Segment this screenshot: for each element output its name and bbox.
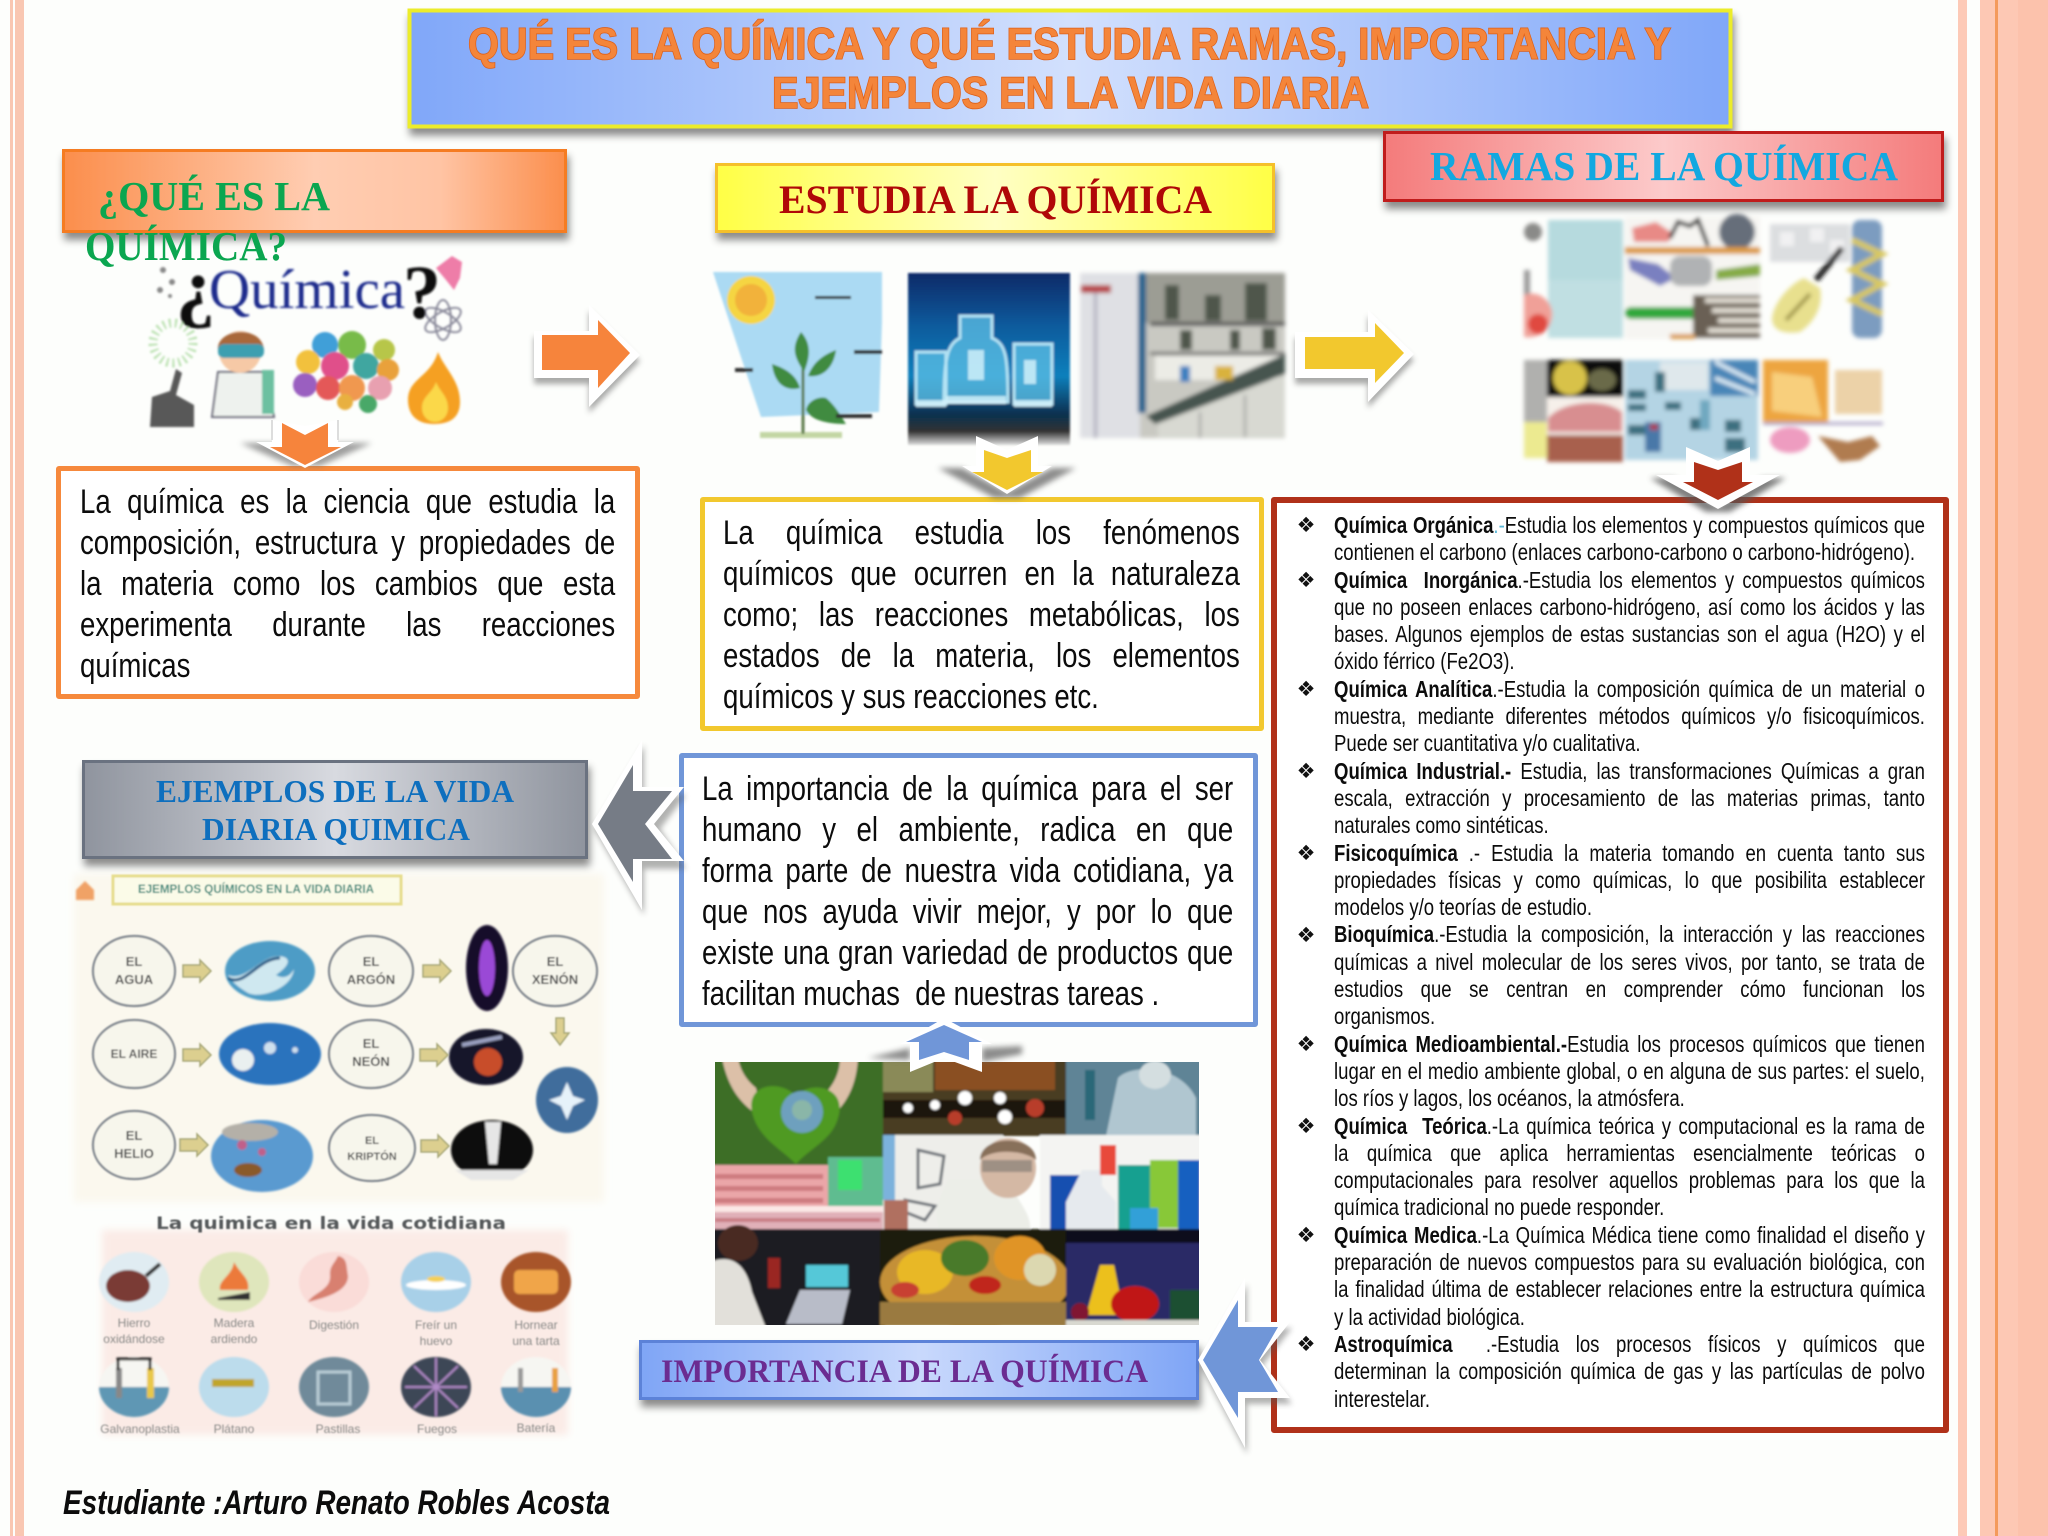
text: ramas: Puede ser cuantitativa y/o cualitativa. bbox=[1334, 730, 1640, 756]
title banner: EJEMPLOS EN LA VIDA DIARIA bbox=[772, 69, 1369, 118]
icon: green burst bbox=[153, 323, 193, 363]
text: definición: La química es la ciencia que estudia la bbox=[80, 482, 615, 520]
text: importancia: existe una gran variedad de productos que bbox=[702, 934, 1233, 972]
circle labels: Hierro bbox=[118, 1316, 151, 1330]
man at laptop bbox=[710, 1229, 885, 1329]
circle labels: Hornear bbox=[514, 1318, 558, 1332]
text: ramas: contienen el carbono (enlaces carbono-carbono o carbono-hidrógeno). bbox=[1334, 539, 1915, 565]
heading: ejemplos de la vida diaria: EJEMPLOS DE LA VIDA bbox=[156, 773, 514, 809]
ovals with labels: NEÓN bbox=[352, 1054, 390, 1069]
heading: estudia la química bbox=[716, 164, 1274, 232]
bottles bbox=[1040, 1135, 1205, 1229]
panel E bbox=[1625, 360, 1758, 460]
ovals with labels: EL bbox=[126, 954, 142, 969]
small arrows bbox=[180, 960, 569, 1157]
ovals with labels: EL bbox=[363, 954, 379, 969]
ovals with labels: EL bbox=[547, 954, 563, 969]
text: ramas: Química Industrial.- Estudia, las transformaciones Químicas a gran bbox=[1334, 758, 1925, 784]
icon: pink splash bbox=[436, 256, 462, 290]
circle labels: Digestión bbox=[309, 1318, 359, 1332]
text: ❖ bbox=[1297, 1223, 1315, 1247]
hands and globe bbox=[710, 1056, 885, 1168]
ovals with labels: EL AIRE bbox=[111, 1047, 157, 1061]
arrow: yellow down bbox=[938, 436, 1076, 498]
circles row 2 bbox=[99, 1357, 571, 1417]
circle labels: Plátano bbox=[214, 1422, 255, 1436]
text: estudia bbox=[723, 514, 1240, 716]
panel A bbox=[1548, 220, 1623, 338]
panel: qué estudia bbox=[700, 497, 1264, 731]
heading: importancia de la química bbox=[640, 1342, 1198, 1398]
text: importancia: facilitan muchas de nuestras tareas . bbox=[702, 974, 1159, 1012]
ovals with labels: KRIPTÓN bbox=[347, 1150, 397, 1163]
arrow: red down bbox=[1650, 447, 1786, 512]
icon: house bbox=[76, 881, 94, 900]
heading: estudia la química: ESTUDIA LA QUÍMICA bbox=[779, 177, 1212, 222]
text: ramas: y la actividad biológica. bbox=[1334, 1304, 1525, 1330]
icon: element bubbles bbox=[293, 331, 399, 413]
title banner: QUÉ ES LA QUÍMICA Y QUÉ ESTUDIA RAMAS, IMPORTANCIA Y bbox=[468, 19, 1671, 69]
circle labels: una tarta bbox=[512, 1334, 560, 1348]
ovals with labels: HELIO bbox=[114, 1146, 154, 1161]
arrow: yellow right bbox=[1295, 310, 1414, 408]
list bullets bbox=[1297, 513, 1315, 1356]
text: definición bbox=[80, 482, 616, 684]
text: estudia: La química estudia los fenómenos bbox=[723, 514, 1240, 552]
text: ramas: modelos y/o teorías de estudio. bbox=[1334, 894, 1592, 920]
text: estudia: químicos y sus reacciones etc. bbox=[723, 678, 1099, 716]
text: ramas: que no poseen enlaces carbono-hidrógeno, así como los ácidos y las bbox=[1334, 594, 1925, 620]
panel: definición de la química bbox=[56, 466, 640, 699]
text: ramas: Química Medica.-La Química Médica tiene como finalidad el diseño y bbox=[1334, 1222, 1925, 1248]
title banner bbox=[410, 10, 1730, 126]
text: ramas: Química Analítica.-Estudia la composición química de un material o bbox=[1334, 676, 1925, 702]
text: importancia bbox=[702, 770, 1234, 1012]
text: estudia: como; las reacciones metabólicas, los bbox=[723, 596, 1240, 634]
heading: ramas de la química: RAMAS DE LA QUÍMICA bbox=[1430, 143, 1898, 189]
coloured photo ovals bbox=[211, 925, 598, 1192]
text: definición: composición, estructura y propiedades de bbox=[80, 524, 615, 562]
right decorative stripes bbox=[1958, 0, 2048, 1536]
periodic table bbox=[710, 1165, 830, 1231]
panel F bbox=[1763, 360, 1828, 422]
image: plant photosynthesis bbox=[712, 272, 882, 438]
text: ramas: computacionales para resolver aquellos problemas para los que la bbox=[1334, 1167, 1925, 1193]
text: ramas: la química que aplica herramientas esencialmente teóricas o bbox=[1334, 1140, 1925, 1166]
icon: atom bbox=[422, 300, 464, 340]
text: ramas: Química Inorgánica.-Estudia los elementos y compuestos químicos bbox=[1334, 567, 1925, 593]
text: ramas: propiedades físicas y como químicas, lo que posibilita establecer bbox=[1334, 867, 1925, 893]
ovals with labels: ARGÓN bbox=[347, 972, 395, 987]
text: definición: experimenta durante las reacciones bbox=[80, 606, 615, 644]
text: ramas: naturales como sintéticas. bbox=[1334, 812, 1549, 838]
circle labels: huevo bbox=[420, 1334, 453, 1348]
image: blue flasks bbox=[908, 273, 1070, 445]
circle labels: oxidándose bbox=[103, 1332, 165, 1346]
text: ramas: la finalidad última de establecer relaciones entre la estructura química bbox=[1334, 1276, 1925, 1302]
text: ramas: bases. Algunos ejemplos de estas sustancias son el agua (H2O) y el bbox=[1334, 621, 1925, 647]
panel D bbox=[1524, 360, 1547, 422]
circle labels: Pastillas bbox=[316, 1422, 360, 1436]
subtitle: La quimica en la vida cotidiana bbox=[156, 1214, 506, 1234]
image: ramas collage bbox=[1524, 214, 1883, 462]
text: ramas: estudios que se centran en comprender cómo funcionan los bbox=[1334, 976, 1925, 1002]
text: ❖ bbox=[1297, 568, 1315, 592]
image: química collage: ? bbox=[403, 251, 441, 335]
left decorative stripes bbox=[10, 0, 24, 1536]
text: definición: la materia como los cambios que esta bbox=[80, 564, 615, 602]
text: ramas: lugar en el medio ambiente global, o en alguna de sus partes: el suelo, bbox=[1334, 1058, 1925, 1084]
ovals with labels: AGUA bbox=[115, 972, 154, 987]
text: ramas: interestelar. bbox=[1334, 1386, 1430, 1412]
cream background bbox=[74, 874, 604, 1202]
text: ❖ bbox=[1297, 759, 1315, 783]
lab technician bbox=[1066, 1056, 1206, 1136]
heading: ejemplos de la vida diaria bbox=[84, 762, 586, 858]
circle labels: Fuegos bbox=[417, 1422, 457, 1436]
image: laboratory bbox=[1080, 273, 1285, 438]
text: ramas: química tradicional no puede responder. bbox=[1334, 1194, 1664, 1220]
woman and molecule bbox=[883, 1135, 1003, 1229]
text: ramas: Fisicoquímica .- Estudia la materia tomando en cuenta tanto sus bbox=[1334, 840, 1925, 866]
heading: ejemplos de la vida diaria: DIARIA QUIMICA bbox=[202, 811, 470, 847]
icon: flame bbox=[408, 352, 460, 424]
arrow: orange down bbox=[240, 420, 372, 468]
circle labels: Galvanoplastia bbox=[100, 1422, 180, 1436]
text: importancia: humano y el ambiente, radica en que bbox=[702, 810, 1233, 848]
text: ❖ bbox=[1297, 677, 1315, 701]
text: ramas: los ríos y lagos, los océanos, la atmósfera. bbox=[1334, 1085, 1685, 1111]
image: química collage: Química bbox=[209, 259, 405, 321]
text: ramas: Bioquímica.-Estudia la composición, la interacción y las reacciones bbox=[1334, 921, 1925, 947]
text: ramas: preparación de nuevos compuestos para su evaluación biológica, con bbox=[1334, 1249, 1925, 1275]
text: ramas: óxido férrico (Fe2O3). bbox=[1334, 648, 1515, 674]
text: ❖ bbox=[1297, 1032, 1315, 1056]
text: ❖ bbox=[1297, 1332, 1315, 1356]
pink background bbox=[102, 1230, 568, 1435]
heading: qué es la química: ¿QUÉ ES LA bbox=[98, 173, 330, 219]
circle labels bbox=[100, 1316, 560, 1436]
heading: importancia de la química: IMPORTANCIA DE LA QUÍMICA bbox=[661, 1353, 1148, 1390]
heading: ramas de la química bbox=[1384, 132, 1942, 200]
icon: scientist bbox=[212, 331, 274, 417]
icon: molecule dots bbox=[157, 267, 175, 298]
panel B bbox=[1625, 217, 1760, 339]
text: ramas: Química Medioambiental.-Estudia los procesos químicos que tienen bbox=[1334, 1031, 1925, 1057]
text: ramas: Química Orgánica.-Estudia los elementos y compuestos químicos que bbox=[1334, 512, 1925, 538]
label: ¿Química?: ¿ bbox=[176, 242, 215, 329]
text: ramas: Astroquímica .-Estudia los procesos físicos y químicos que bbox=[1334, 1331, 1925, 1357]
label box: ejemplos bbox=[113, 876, 401, 904]
text: ramas: organismos. bbox=[1334, 1003, 1435, 1029]
text: ❖ bbox=[1297, 923, 1315, 947]
ovals with labels: EL bbox=[365, 1135, 379, 1147]
text: importancia: La importancia de la química para el ser bbox=[702, 770, 1233, 808]
panel: ramas de la química lista bbox=[1271, 497, 1949, 1433]
text: importancia: forma parte de nuestra vida cotidiana, ya bbox=[702, 852, 1233, 890]
student name: Estudiante :Arturo Renato Robles Acosta bbox=[63, 1484, 610, 1522]
heading: qué es la química bbox=[64, 150, 566, 269]
ovals with labels: XENÓN bbox=[532, 972, 578, 987]
circles row 1 bbox=[99, 1252, 571, 1312]
arrow: orange right bbox=[534, 305, 640, 413]
molecule bbox=[883, 1056, 1069, 1136]
label box: ejemplos: EJEMPLOS QUÍMICOS EN LA VIDA DIARIA bbox=[138, 881, 374, 896]
circle labels: ardiendo bbox=[211, 1332, 258, 1346]
image: importancia collage bbox=[710, 1056, 1206, 1329]
text: ramas: determinan la composición química de gas y las partículas de polvo bbox=[1334, 1358, 1925, 1384]
text: definición: químicas bbox=[80, 646, 190, 684]
arrow: blue up bbox=[868, 1018, 1022, 1072]
ovals with labels: EL bbox=[363, 1036, 379, 1051]
image: ejemplos químicos en la vida diaria bbox=[74, 874, 604, 1436]
text: ramas: Química Teórica.-La química teórica y computacional es la rama de bbox=[1334, 1113, 1925, 1139]
coloured flasks bbox=[1066, 1229, 1206, 1329]
panel C bbox=[1770, 224, 1850, 262]
circle labels: Madera bbox=[214, 1316, 255, 1330]
image: química collage bbox=[150, 242, 464, 427]
ovals with labels: EL bbox=[126, 1128, 142, 1143]
text: estudia: químicos que ocurren en la naturaleza bbox=[723, 555, 1240, 593]
vegetables bbox=[880, 1229, 1066, 1325]
circle labels: Freír un bbox=[415, 1318, 457, 1332]
circle labels: Batería bbox=[517, 1421, 556, 1435]
ovals with labels bbox=[93, 936, 597, 1181]
text: ramas: químicas a nivel molecular de los seres vivos, por tanto, se trata de bbox=[1334, 949, 1925, 975]
heading: qué es la química: QUÍMICA? bbox=[85, 223, 287, 269]
arrow: blue left bbox=[1198, 1278, 1292, 1454]
text: importancia: que nos ayuda vivir mejor, y por lo que bbox=[702, 892, 1233, 930]
text: ❖ bbox=[1297, 841, 1315, 865]
text: ❖ bbox=[1297, 1114, 1315, 1138]
arrow: grey left bbox=[592, 740, 686, 915]
panel: importancia bbox=[679, 753, 1258, 1027]
text: estudia: estados de la materia, los elementos bbox=[723, 637, 1240, 675]
text: ramas: muestra, mediante diferentes métodos químicos y/o fisicoquímicos. bbox=[1334, 703, 1925, 729]
text: ramas: escala, extracción y procesamiento de las materias primas, tanto bbox=[1334, 785, 1925, 811]
text: ❖ bbox=[1297, 513, 1315, 537]
text: ramas bbox=[1334, 512, 1925, 1412]
icon: dark flask bbox=[150, 369, 194, 427]
